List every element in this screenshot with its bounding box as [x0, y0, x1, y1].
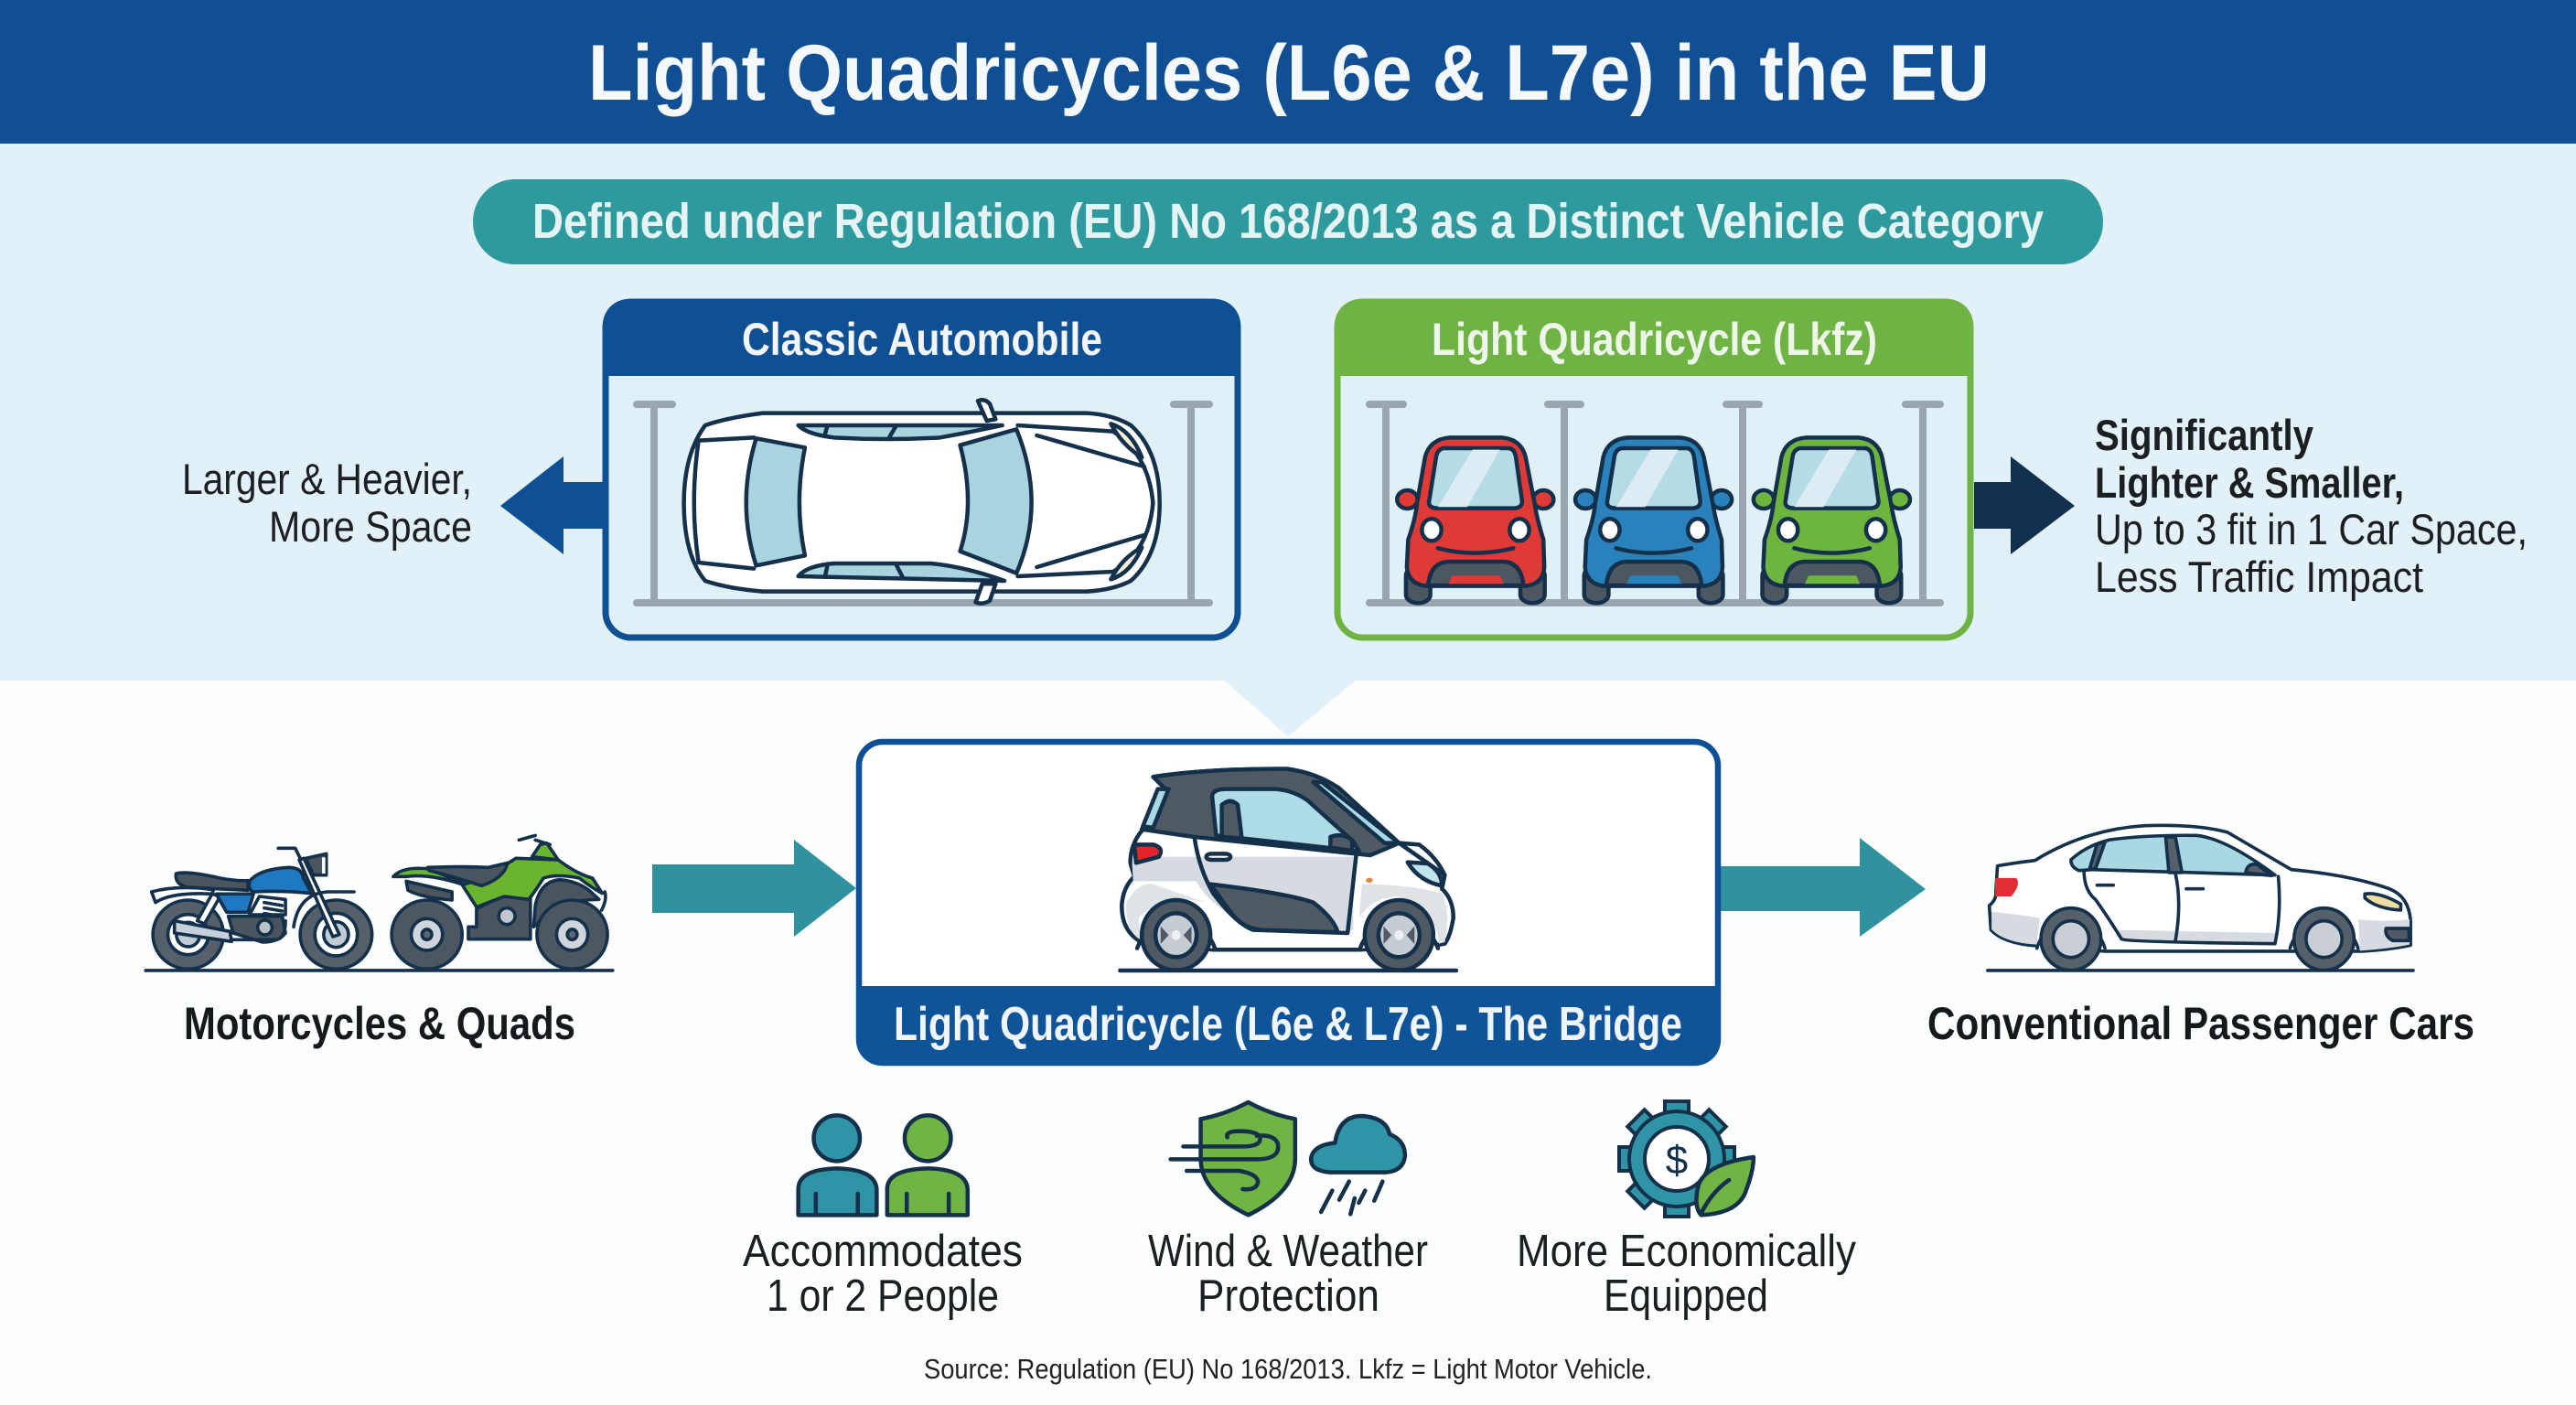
- feature: more economically equipped: Equipped: [1604, 1271, 1768, 1321]
- arrow: larger to the left: [500, 456, 603, 554]
- car: red quadricycle: [1397, 437, 1553, 603]
- icon: motorcycle and quad: [145, 835, 613, 971]
- parking bay lines: [637, 404, 1209, 603]
- arrow: from quadricycle to cars: [1720, 838, 1926, 937]
- text: significantly lighter and smaller: [2095, 411, 2528, 601]
- parking bay lines: [1369, 404, 1940, 603]
- icon: conventional car: [1988, 825, 2413, 971]
- label: conventional passenger cars: Conventional Passenger Cars: [1927, 998, 2474, 1049]
- car: green quadricycle: [1754, 437, 1910, 603]
- heading: the bridge: Light Quadricycle (L6e & L7e) - The Bridge: [894, 998, 1682, 1051]
- car: blue quadricycle: [1575, 437, 1732, 603]
- source note: Source: Regulation (EU) No 168/2013. Lkfz = Light Motor Vehicle.: [924, 1353, 1652, 1385]
- text: significantly lighter and smaller: Significantly: [2095, 411, 2313, 459]
- label: motorcycles and quads: Motorcycles & Quads: [184, 998, 575, 1049]
- feature: wind and weather: Wind & Weather: [1148, 1227, 1428, 1276]
- regulation pill: Defined under Regulation (EU) No 168/2013 as a Distinct Vehicle Category: [532, 194, 2044, 249]
- text: larger and heavier: Larger & Heavier,: [182, 455, 472, 503]
- text: significantly lighter and smaller: Less Traffic Impact: [2095, 552, 2423, 601]
- feature: more economically equipped: More Economically: [1517, 1227, 1856, 1276]
- heading: light quadricycle: Light Quadricycle (Lkfz): [1432, 314, 1877, 365]
- feature: wind and weather: [1148, 1227, 1428, 1321]
- feature: wind and weather: Protection: [1197, 1271, 1379, 1321]
- text: larger and heavier: More Space: [269, 502, 472, 551]
- motorcycle: [152, 848, 372, 969]
- feature: accommodates people: 1 or 2 People: [767, 1271, 999, 1321]
- car: top view: [684, 400, 1160, 604]
- arrow: from motorcycles to quadricycle: [652, 840, 856, 937]
- panel: the bridge: [856, 742, 1721, 1066]
- regulation pill: [473, 179, 2103, 264]
- title banner: Light Quadricycles (L6e & L7e) in the EU: [588, 29, 1990, 117]
- panel: light quadricycle: [1335, 299, 1973, 638]
- icon: gear with dollar and leaf: [1619, 1101, 1754, 1217]
- icon: gear with dollar and leaf: $: [1666, 1138, 1688, 1183]
- feature: more economically equipped: [1517, 1227, 1856, 1321]
- text: significantly lighter and smaller: Up to 3 fit in 1 Car Space,: [2095, 505, 2528, 553]
- icon: wind shield and rain cloud: [1171, 1102, 1405, 1215]
- arrow: smaller to the right: [1974, 456, 2075, 554]
- quad bike: [392, 835, 607, 969]
- text: larger and heavier: [182, 455, 472, 551]
- panel: classic automobile: [603, 299, 1240, 638]
- ground line: [145, 969, 613, 972]
- light blue upper band: [0, 144, 2576, 736]
- text: significantly lighter and smaller: Lighter & Smaller,: [2095, 458, 2404, 507]
- heading: classic automobile: Classic Automobile: [742, 314, 1102, 365]
- icon: two people: [799, 1115, 968, 1215]
- feature: accommodates people: Accommodates: [743, 1227, 1023, 1276]
- title banner: [0, 0, 2576, 144]
- feature: accommodates people: [743, 1227, 1023, 1321]
- car: side view quadricycle: [1120, 769, 1456, 971]
